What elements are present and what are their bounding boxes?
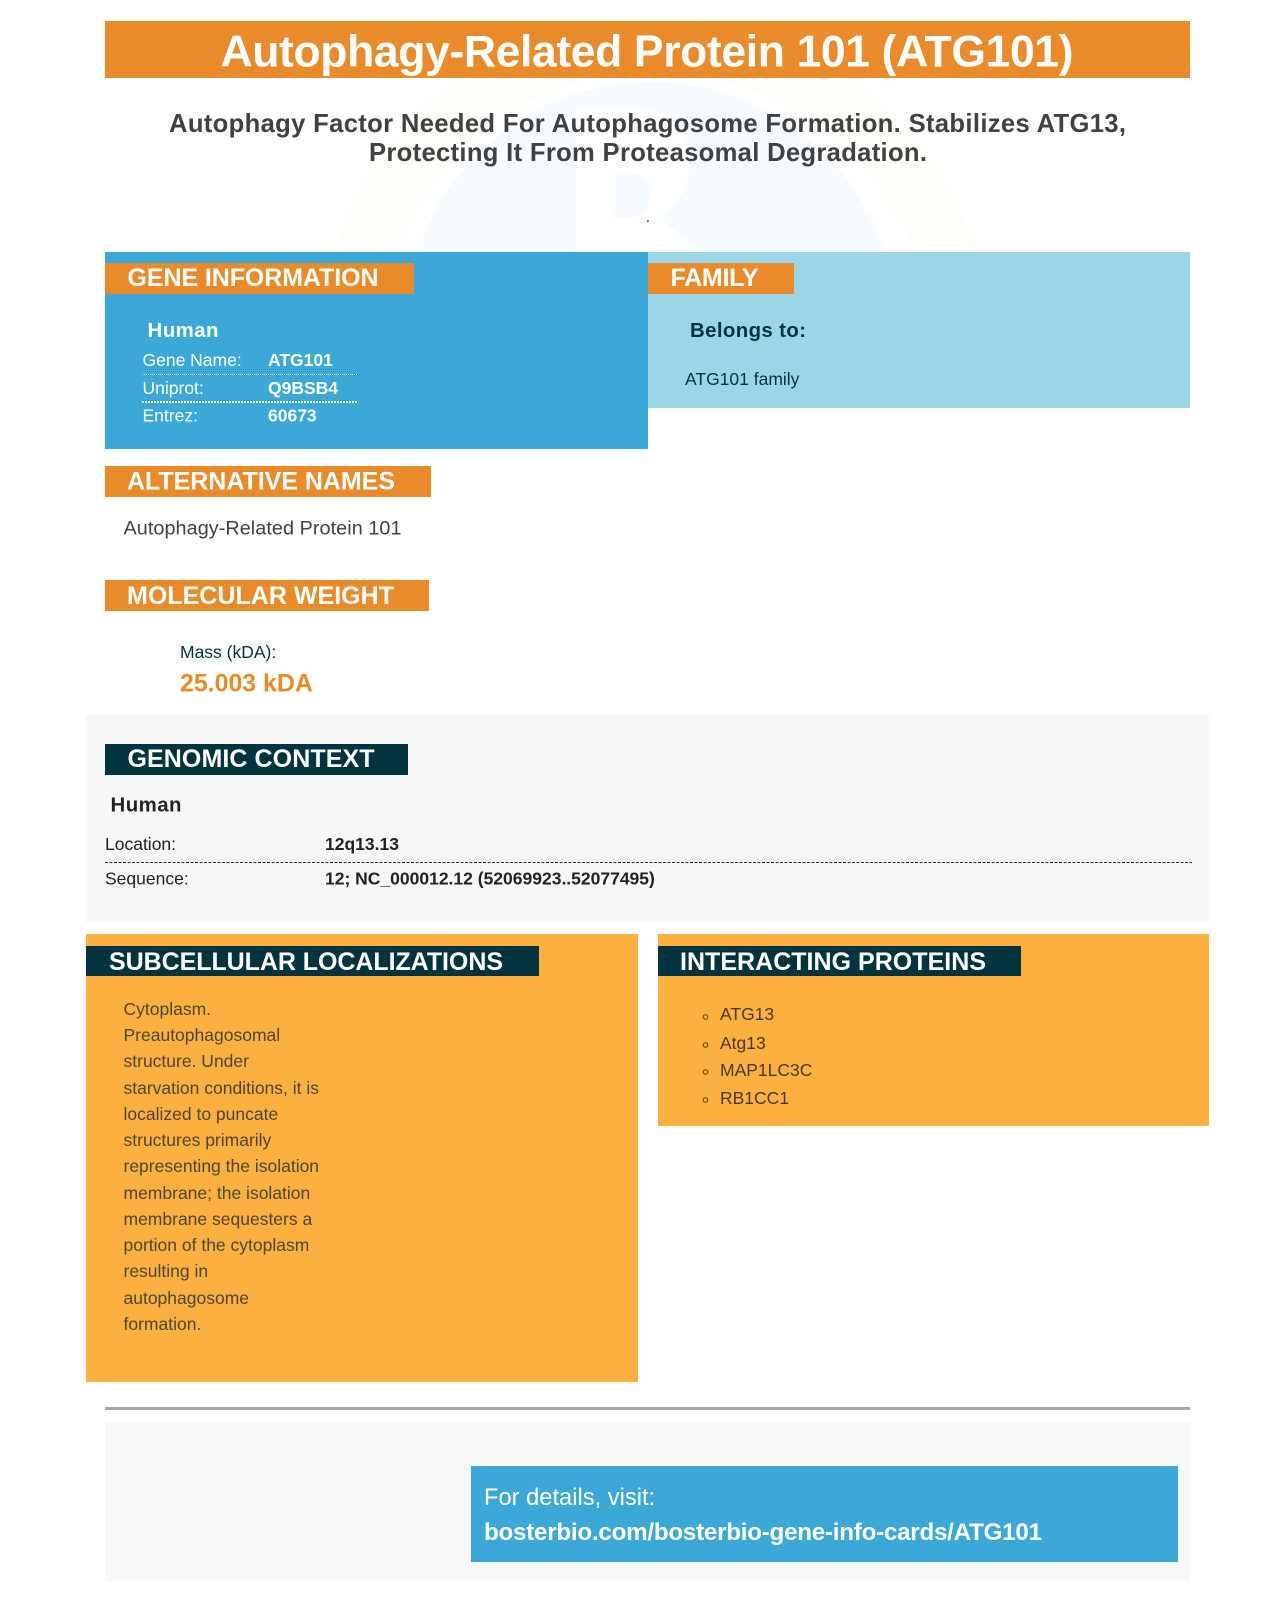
location row	[105, 834, 399, 854]
gene identifiers table: 60673	[268, 406, 317, 426]
mass label: Mass (kDA):	[180, 642, 276, 662]
localization description: portion of the cytoplasm	[124, 1235, 309, 1255]
heading: gene information: GENE INFORMATION	[128, 264, 378, 292]
callout: details link: bosterbio.com/bosterbio-gene-info-cards/ATG101	[484, 1519, 1042, 1546]
gene identifiers table: Gene Name:	[142, 350, 242, 370]
callout: details link	[471, 1466, 1178, 1562]
localization description: representing the isolation	[124, 1156, 319, 1176]
localization description: formation.	[124, 1314, 201, 1334]
panel: subcellular localizations	[86, 934, 638, 1382]
panel: footer	[105, 1422, 1190, 1581]
protein list: ATG13	[720, 1004, 774, 1024]
panel: molecular weight	[105, 580, 429, 698]
gene identifiers table	[142, 350, 357, 426]
sequence row: Sequence:	[105, 868, 189, 888]
localization description: localized to puncate	[124, 1104, 278, 1124]
callout: details link: For details, visit:	[484, 1485, 655, 1511]
panel: family	[648, 252, 1190, 408]
protein list	[703, 1004, 812, 1108]
title banner	[105, 21, 1190, 78]
panel: gene information	[105, 252, 648, 449]
localization description: starvation conditions, it is	[124, 1078, 319, 1098]
gene identifiers table: Uniprot:	[142, 378, 204, 398]
localization description: membrane sequesters a	[124, 1209, 312, 1229]
stray period: .	[646, 209, 650, 225]
mass value: 25.003 kDA	[180, 670, 313, 698]
gene identifiers table: Entrez:	[142, 406, 198, 426]
localization description: structures primarily	[124, 1130, 272, 1150]
species label: Human	[110, 794, 182, 816]
heading: subcellular localizations: SUBCELLULAR LOCALIZATIONS	[109, 948, 503, 976]
gene identifiers table: ATG101	[268, 350, 333, 370]
protein list: RB1CC1	[720, 1088, 789, 1108]
localization description: Cytoplasm.	[124, 999, 211, 1019]
heading: genomic context: GENOMIC CONTEXT	[128, 745, 374, 773]
title banner: Autophagy-Related Protein 101 (ATG101)	[220, 28, 1074, 76]
localization description: resulting in	[124, 1261, 208, 1281]
sequence row	[105, 868, 655, 888]
subtitle: Autophagy Factor Needed For Autophagosome Formation. Stabilizes ATG13,	[169, 110, 1126, 138]
alternative name text: Autophagy-Related Protein 101	[124, 518, 402, 540]
location row: Location:	[105, 834, 176, 854]
localization description: Preautophagosomal	[124, 1025, 280, 1045]
protein list: MAP1LC3C	[720, 1060, 812, 1080]
subtitle: Protecting It From Proteasomal Degradation.	[369, 139, 927, 167]
panel: alternative names	[105, 466, 431, 540]
subtitle	[169, 110, 1126, 167]
localization description: membrane; the isolation	[124, 1183, 310, 1203]
location row: 12q13.13	[325, 834, 399, 854]
watermark logo	[418, 82, 884, 252]
panel: genomic context	[86, 715, 1209, 922]
heading: family	[648, 263, 794, 294]
heading: interacting proteins: INTERACTING PROTEINS	[680, 948, 986, 976]
gene identifiers table: Q9BSB4	[268, 378, 338, 398]
species label: Human	[148, 320, 218, 342]
heading: family: FAMILY	[670, 264, 759, 292]
sequence row: 12; NC_000012.12 (52069923..52077495)	[325, 868, 655, 888]
protein list: Atg13	[720, 1033, 766, 1053]
family name: ATG101 family	[685, 369, 800, 389]
panel: alternative names: ALTERNATIVE NAMES	[127, 468, 395, 496]
belongs to label: Belongs to:	[690, 320, 806, 342]
localization description	[124, 999, 319, 1334]
panel: interacting proteins	[658, 934, 1209, 1126]
localization description: autophagosome	[124, 1288, 249, 1308]
localization description: structure. Under	[124, 1051, 249, 1071]
panel: molecular weight: MOLECULAR WEIGHT	[127, 582, 394, 610]
